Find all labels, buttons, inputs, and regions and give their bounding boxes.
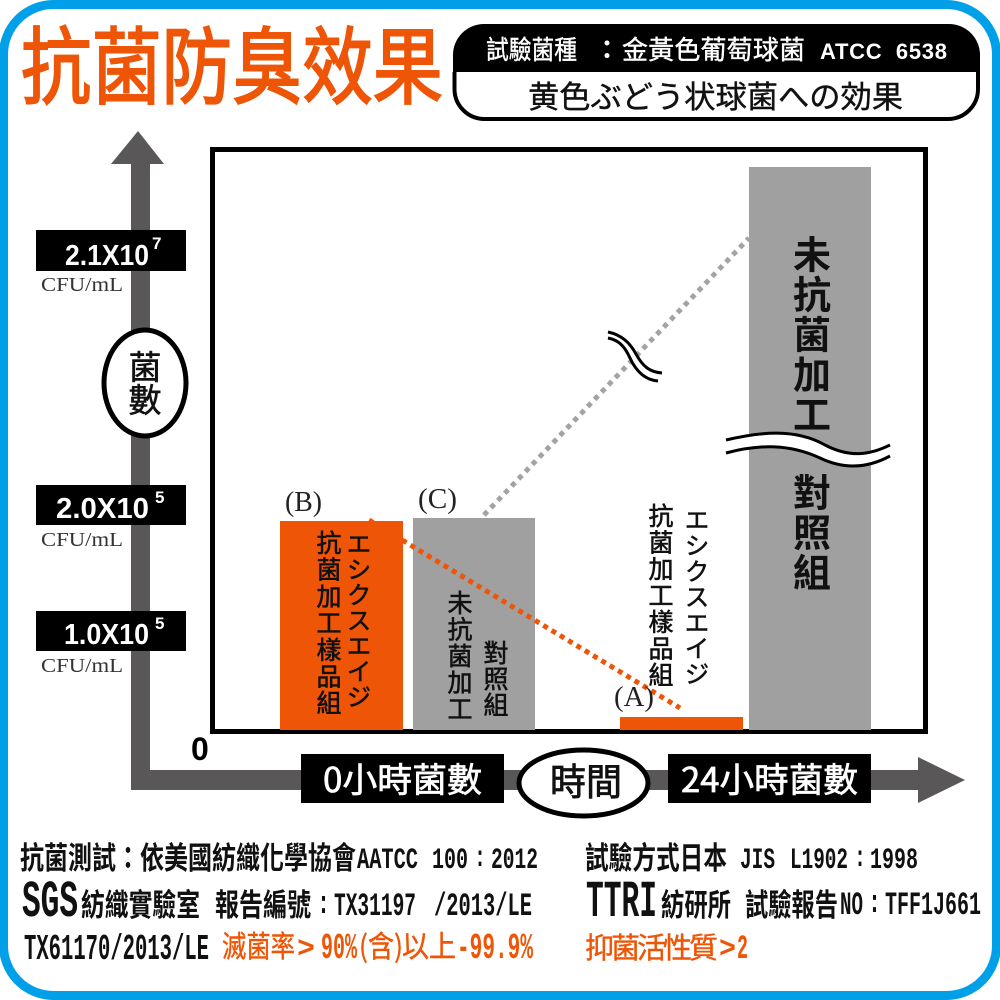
footnote left: 2012 xyxy=(491,844,538,878)
footnote right: 試驗方式日本 xyxy=(585,833,727,878)
time box 0h: 0小時菌數 xyxy=(323,753,482,802)
footnote right: : xyxy=(854,842,866,876)
y label 2.1x10^7: 7 xyxy=(152,234,161,253)
footnote left: /2013/LE xyxy=(434,888,532,925)
footnote right xyxy=(585,833,981,969)
footnote left: -99.9% xyxy=(457,928,533,969)
bar A text: エシクスエイジ xyxy=(679,507,715,687)
footnote left: : xyxy=(317,886,330,923)
y label 2.0x10^5: 5 xyxy=(155,488,164,507)
header colon: ： xyxy=(594,30,620,67)
axis break on bar D xyxy=(726,433,890,466)
bar C gray xyxy=(413,518,535,730)
bar B orange xyxy=(280,521,403,730)
footnote right: TTRI xyxy=(586,873,657,932)
y label 2.0x10^5 xyxy=(36,485,186,525)
bar D text: 未抗菌加工 xyxy=(784,235,840,435)
footnote right: 試驗報告 xyxy=(745,880,838,925)
y axis title ellipse: 菌數 xyxy=(121,350,169,416)
bar D gray xyxy=(749,167,871,730)
title: 抗菌防臭效果 xyxy=(21,1,443,122)
time axis ellipse xyxy=(519,750,648,816)
chart frame xyxy=(212,150,926,732)
gray dotted trend line xyxy=(484,238,749,515)
bar A text: 抗菌加工樣品組 xyxy=(643,503,679,688)
footnote left: SGS xyxy=(22,873,78,932)
y label 1.0x10^5: 5 xyxy=(155,614,164,633)
y label 2.1x10^7: 2.1X10 xyxy=(65,240,149,272)
y axis title ellipse xyxy=(104,330,186,436)
footnote left: TX61170/2013/LE xyxy=(24,929,209,970)
header species text: 金黃色葡萄球菌 xyxy=(622,30,805,67)
footnote left: AATCC xyxy=(357,844,418,878)
footnote right: JIS xyxy=(740,844,775,878)
y label 2.0x10^5: 2.0X10 xyxy=(56,493,149,525)
time box 24h: 24小時菌數 xyxy=(681,753,858,802)
footnote left: 90% xyxy=(321,928,357,969)
time axis ellipse: 時間 xyxy=(550,752,622,806)
unit label: CFU/mL xyxy=(41,274,123,296)
footnote right: > xyxy=(719,933,736,967)
bar A label: (A) xyxy=(614,682,654,713)
footnote left: 報告編號 xyxy=(215,880,311,925)
bar C text: 對照組 xyxy=(478,640,514,718)
bar C label: (C) xyxy=(418,484,457,515)
header box: test strain xyxy=(453,24,980,119)
footnote left: : xyxy=(474,842,486,876)
footnote left: 以上 xyxy=(402,922,456,966)
footnote left: 滅菌率 xyxy=(222,922,295,966)
footnote left: TX31197 xyxy=(334,888,416,925)
bar D text xyxy=(784,235,840,593)
footnote right: NO xyxy=(840,887,863,924)
y label 1.0x10^5 xyxy=(36,611,186,651)
footnote right: L1902 xyxy=(790,844,848,878)
orange dotted trend line xyxy=(369,520,680,708)
footnote right: 1998 xyxy=(870,844,918,878)
y label 1.0x10^5: 1.0X10 xyxy=(64,619,149,651)
footnote right: 抑菌活性質 xyxy=(585,925,718,967)
bar B text xyxy=(311,530,377,717)
footnote right: 紡研所 xyxy=(661,880,731,925)
y label 2.1x10^7 xyxy=(36,230,186,272)
footnote left: 抗菌測試：依美國紡織化學協會 xyxy=(20,833,356,878)
footnote right: 2 xyxy=(737,931,748,969)
header Japanese text: 黄色ぶどう状球菌への効果 xyxy=(528,72,903,117)
footnote left: 100 xyxy=(432,844,468,878)
bar C text xyxy=(442,590,514,722)
unit label: CFU/mL xyxy=(41,655,123,677)
bar D text: 對照組 xyxy=(784,473,840,593)
footnote left: 紡織實驗室 xyxy=(81,880,200,925)
footnote left xyxy=(20,833,538,970)
footnote left: > xyxy=(297,933,315,967)
bar B text: 抗菌加工樣品組 xyxy=(311,530,347,717)
header strain text: 試驗菌種 xyxy=(486,30,577,67)
footnote left: (含) xyxy=(359,922,403,966)
origin zero: 0 xyxy=(191,731,209,767)
bar A text xyxy=(643,503,715,688)
bar C text: 未抗菌加工 xyxy=(442,590,478,722)
header ATCC text: ATCC 6538 xyxy=(820,39,947,64)
bar B label: (B) xyxy=(285,487,322,518)
footnote right: : xyxy=(868,885,881,922)
axis break on dotted line xyxy=(608,332,662,381)
y axis arrow xyxy=(111,131,965,803)
unit label: CFU/mL xyxy=(41,529,123,551)
bar A orange xyxy=(620,717,743,730)
bar B text: エシクスエイジ xyxy=(341,531,377,710)
